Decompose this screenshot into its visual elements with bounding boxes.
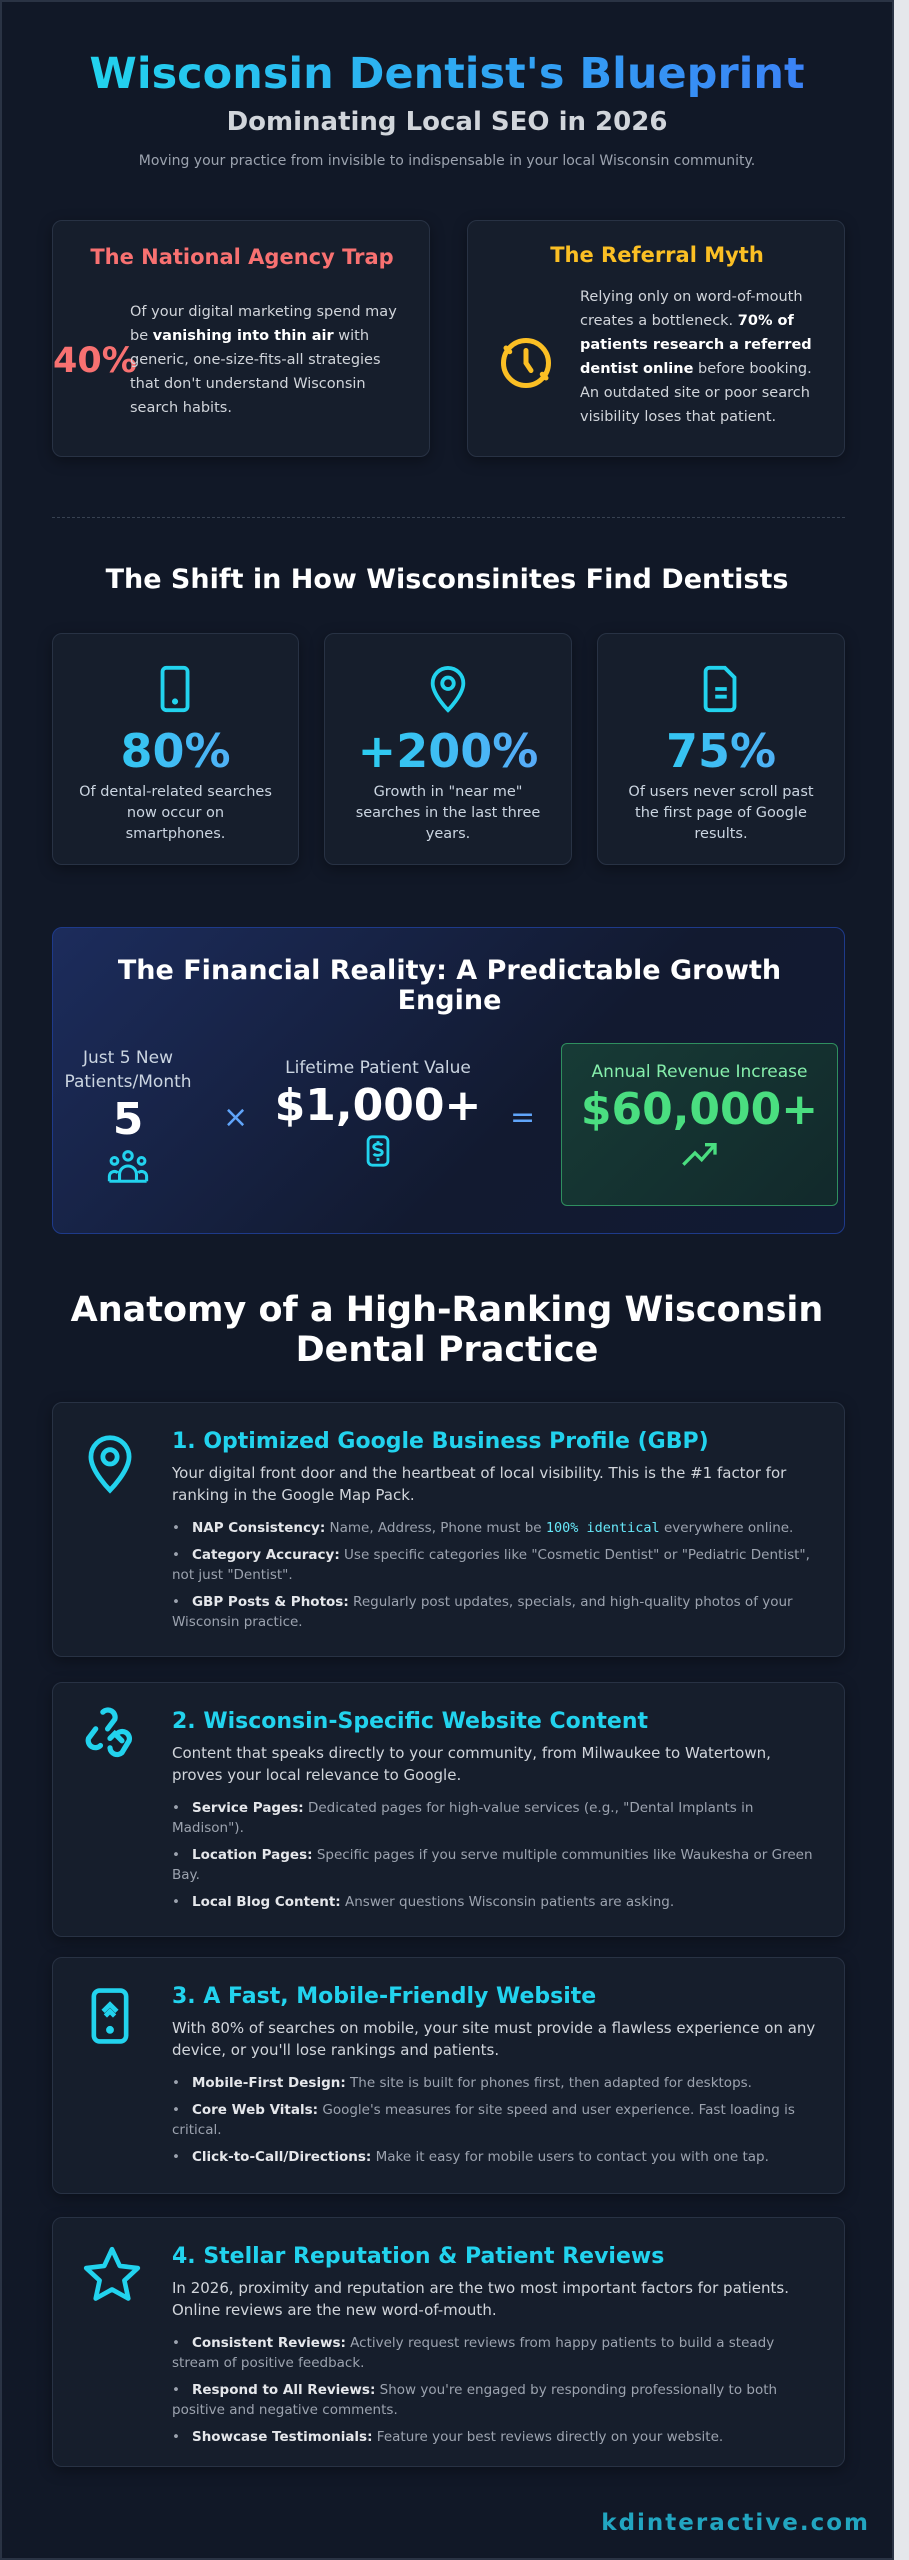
tagline: Moving your practice from invisible to indispensable in your local Wisconsin community. — [139, 153, 755, 169]
stat card: 80%: 80% — [120, 724, 231, 778]
stat card: 75%: 75% — [666, 724, 776, 778]
card: mobile website: Mobile-First Design: The site is built for phones first, then adapted for desktops. — [192, 2075, 752, 2091]
heading: anatomy: Anatomy of a High-Ranking Wisconsin — [71, 1290, 823, 1330]
panel: national agency trap — [52, 220, 430, 457]
card: reviews: Showcase Testimonials: Feature your best reviews directly on your website. — [192, 2429, 723, 2445]
stat card: +200% — [324, 633, 572, 865]
icon: dollar — [366, 1135, 390, 1167]
icon: clock — [501, 338, 551, 388]
stat card: +200%: Growth in "near me" searches in the last three years. — [356, 784, 540, 842]
heading: anatomy — [70, 1290, 823, 1370]
stat card: 80% — [52, 633, 299, 865]
card: website content: 2. Wisconsin-Specific Website Content — [172, 1709, 648, 1734]
card: GBP: 1. Optimized Google Business Profile (GBP) — [172, 1429, 709, 1454]
card: GBP: Category Accuracy: Use specific categories like "Cosmetic Dentist" or "Pediatric Dentist", not just "Dentist". — [172, 1547, 810, 1583]
heading: national agency trap: The National Agency Trap — [90, 245, 394, 269]
card: GBP: Your digital front door and the heartbeat of local visibility. This is the #1 factor for ranking in the Google Map Pack. — [172, 1464, 786, 1504]
card: mobile website — [52, 1957, 845, 2194]
item: lifetime value: $1,000+ — [275, 1080, 481, 1131]
item: new patients: Just 5 New Patients/Month — [64, 1048, 192, 1092]
result box: annual revenue: Annual Revenue Increase — [592, 1062, 807, 1082]
card: reviews: In 2026, proximity and reputation are the two most important factors for patients. Online reviews are the new word-of-mouth. — [172, 2279, 789, 2319]
card: website content: Local Blog Content: Answer questions Wisconsin patients are asking. — [192, 1894, 674, 1910]
heading: anatomy: Dental Practice — [296, 1330, 598, 1370]
result box: annual revenue: $60,000+ — [581, 1084, 818, 1135]
icon: people — [108, 1150, 148, 1183]
card: reviews: Respond to All Reviews: Show you're engaged by responding professionally to both positive and negative comments. — [172, 2382, 777, 2418]
result box: annual revenue — [561, 1043, 838, 1206]
text: agency trap: Of your digital marketing spend may be vanishing into thin air with generic, one-size-fits-all strategies that don't understand Wisconsin search habits. — [130, 304, 397, 416]
card: mobile website: 3. A Fast, Mobile-Friendly Website — [172, 1984, 596, 2009]
item: new patients: 5 — [113, 1094, 143, 1145]
item: new patients — [64, 1048, 192, 1183]
card: GBP — [52, 1402, 845, 1657]
operator: times: × — [223, 1100, 248, 1135]
card: GBP: GBP Posts & Photos: Regularly post updates, specials, and high-quality photos of your Wisconsin practice. — [172, 1594, 793, 1630]
item: lifetime value: Lifetime Patient Value — [285, 1058, 471, 1078]
card: reviews: Consistent Reviews: Actively request reviews from happy patients to build a steady stream of positive feedback. — [172, 2335, 774, 2371]
panel: referral myth — [467, 220, 845, 457]
card: website content: Content that speaks directly to your community, from Milwaukee to Watertown, proves your local relevance to Google. — [172, 1744, 771, 1784]
icon: star — [84, 2246, 140, 2301]
icon: mobile — [92, 1988, 128, 2044]
heading: the shift: The Shift in How Wisconsinites Find Dentists — [106, 564, 788, 595]
icon: link — [86, 1707, 132, 1758]
icon: document — [704, 666, 736, 712]
operator: equals: = — [510, 1100, 535, 1135]
card: GBP: NAP Consistency: Name, Address, Phone must be 100% identical everywhere online. — [192, 1520, 793, 1536]
text: referral myth: Relying only on word-of-mouth creates a bottleneck. 70% of patients research a referred dentist online before booking. An outdated site or poor search visibility loses that patient. — [580, 289, 812, 425]
stat: 40%: 40% — [53, 341, 137, 381]
icon: phone — [160, 666, 190, 712]
stat card: 75% — [597, 633, 845, 865]
card: mobile website: With 80% of searches on mobile, your site must provide a flawless experience on any device, or you'll lose rankings and patients. — [172, 2019, 815, 2059]
footer: brand: kdinteractive.com — [601, 2510, 870, 2536]
card: mobile website: Core Web Vitals: Google's measures for site speed and user experience. Fast loading is critical. — [172, 2102, 795, 2138]
card: website content: Service Pages: Dedicated pages for high-value services (e.g., "Dental Implants in Madison"). — [172, 1800, 753, 1836]
stat card: 75%: Of users never scroll past the first page of Google results. — [628, 784, 814, 842]
card: reviews: 4. Stellar Reputation & Patient Reviews — [172, 2244, 664, 2269]
card: reviews — [52, 2217, 845, 2467]
icon: map pin — [430, 666, 466, 713]
title: Wisconsin Dentist's Blueprint — [89, 49, 805, 99]
card: mobile website: Click-to-Call/Directions: Make it easy for mobile users to contact you with one tap. — [192, 2149, 769, 2165]
stat card: 80%: Of dental-related searches now occur on smartphones. — [79, 784, 272, 842]
icon: map pin — [88, 1435, 132, 1494]
subtitle: Dominating Local SEO in 2026 — [227, 107, 667, 137]
stat card: +200%: +200% — [358, 724, 538, 778]
panel: financial reality — [52, 927, 845, 1234]
heading: referral myth: The Referral Myth — [550, 243, 764, 267]
icon: trending up — [682, 1143, 717, 1166]
item: lifetime value — [275, 1058, 481, 1167]
card: website content: Location Pages: Specific pages if you serve multiple communities like Waukesha or Green Bay. — [172, 1847, 813, 1883]
card: website content — [52, 1682, 845, 1937]
heading: financial: The Financial Reality: A Predictable Growth Engine — [118, 955, 781, 1016]
